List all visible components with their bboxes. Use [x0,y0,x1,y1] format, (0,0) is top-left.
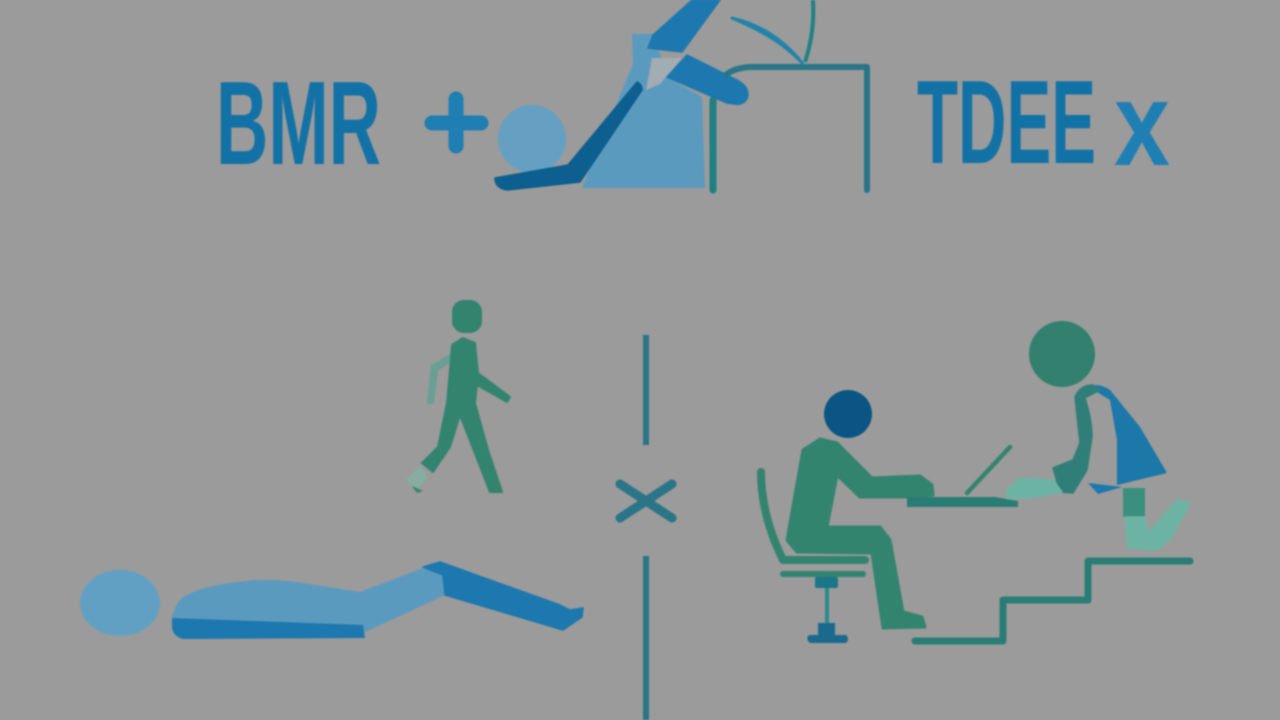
icon: person climbing stairs [915,321,1190,641]
divider with multiply sign [620,335,672,720]
heading: TDEE: TDEE [917,56,1096,189]
icon: person reclining at desk [495,0,867,190]
icon: plus [432,99,481,146]
icon: lying person [80,562,583,639]
icon: seated person at laptop [761,390,1018,643]
heading: multiply x: x [1114,58,1170,191]
heading: BMR: BMR [216,57,381,190]
icon: walking person [407,300,510,493]
